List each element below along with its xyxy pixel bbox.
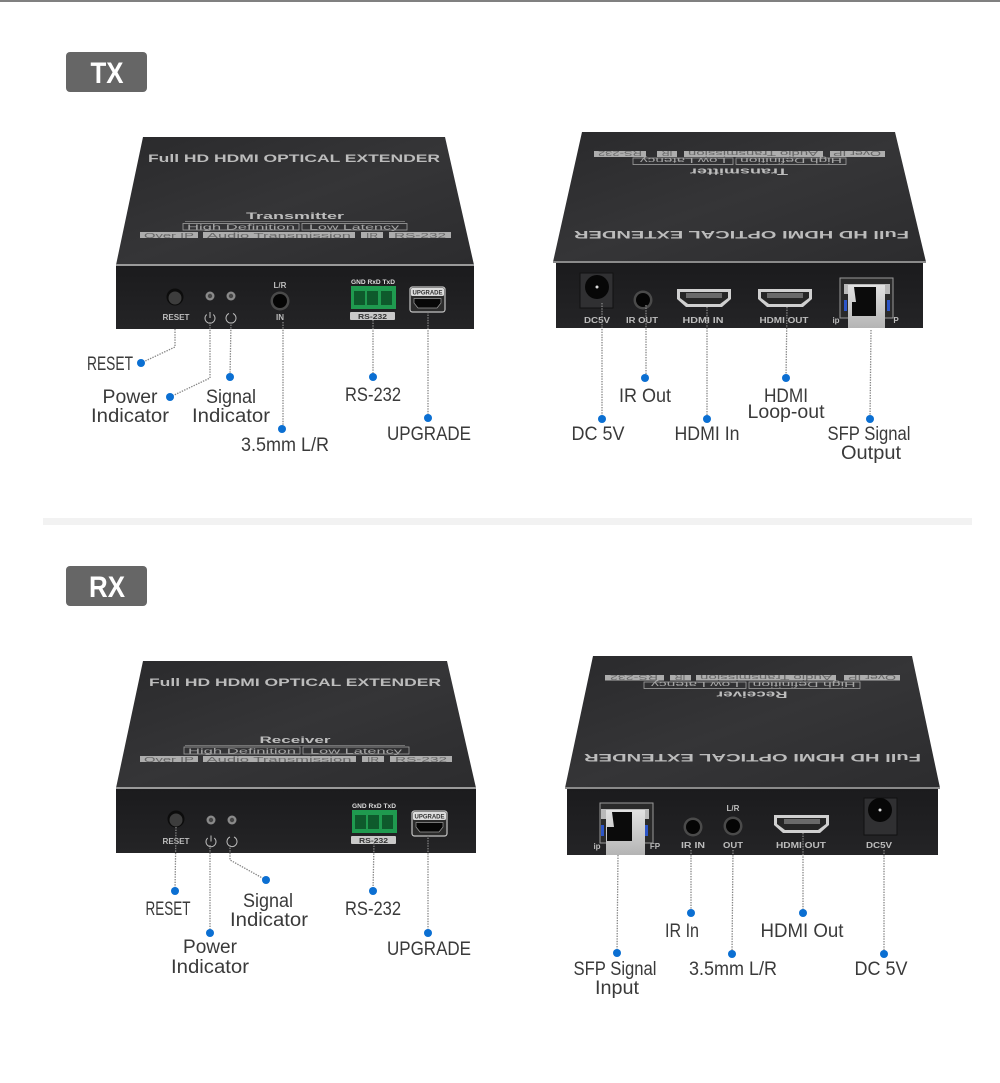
device: TX front housing: UPGRADE — [412, 290, 442, 296]
device: RX back housing: High Definition — [752, 680, 856, 687]
callout: RESET — [146, 827, 191, 920]
callout: 3.5mm L/R: 3.5mm L/R — [241, 435, 329, 456]
callout: SFP Signal Output — [828, 330, 910, 464]
callout: Signal Indicator — [230, 845, 309, 931]
device: RX front housing: GND RxD TxD — [352, 803, 396, 810]
callout: Power Indicator: Indicator — [171, 957, 250, 978]
device: RX back housing: Receiver — [716, 688, 788, 700]
device: RX back housing: Audio Transmission — [700, 673, 832, 680]
device: TX front housing: GND RxD TxD — [351, 279, 395, 286]
device: RX front housing: Over IP — [144, 757, 195, 764]
device: TX back housing: ip — [832, 316, 840, 325]
device: TX front housing: IR — [366, 233, 378, 240]
badge: TX — [66, 52, 147, 92]
callout: 3.5mm L/R — [689, 850, 777, 980]
callout: SFP Signal Output: SFP Signal — [828, 424, 910, 445]
device: RX front housing: Audio Transmission — [206, 757, 352, 764]
panel: TX back device — [553, 132, 926, 464]
badge: RX — [66, 566, 147, 606]
callout: HDMI In — [674, 307, 740, 445]
device: TX back housing: IR — [662, 149, 672, 156]
callout: Signal Indicator: Indicator — [192, 406, 271, 427]
callout: DC 5V — [572, 303, 625, 445]
device: TX back housing: P — [893, 316, 899, 325]
callout: SFP Signal Input — [574, 855, 656, 999]
callout: RESET — [87, 329, 175, 375]
device: RX back housing: IR — [674, 673, 686, 680]
device: TX front housing: RS-232 — [358, 312, 387, 321]
device: RX front housing: UPGRADE — [414, 814, 444, 820]
panel: RX back device — [565, 656, 940, 999]
device: RX back housing: ip — [593, 842, 601, 851]
device: RX back housing: DC5V — [866, 841, 893, 850]
callout: SFP Signal Input: SFP Signal — [574, 959, 656, 980]
callout: DC 5V — [854, 850, 908, 980]
callout: IR Out — [619, 305, 672, 407]
callout: SFP Signal Output: Output — [841, 443, 902, 464]
device: TX back housing: Over IP — [832, 149, 881, 156]
device: RX front housing: Low Latency — [310, 748, 403, 756]
callout: UPGRADE — [387, 312, 471, 445]
callout: Power Indicator — [171, 845, 250, 978]
device: TX front housing — [116, 137, 474, 329]
device: TX back housing: IR OUT — [626, 316, 658, 325]
device: TX front housing: Full HD HDMI OPTICAL EXTENDER — [148, 153, 440, 165]
device: RX front housing: Receiver — [260, 735, 331, 746]
device: RX back housing: RS-232 — [610, 673, 658, 680]
device: RX front housing: RS-232 — [395, 757, 447, 764]
device: RX back housing: Full HD HDMI OPTICAL EXTENDER — [584, 751, 921, 763]
device: TX front housing: Over IP — [144, 233, 195, 240]
device: TX front housing: RS-232 — [394, 233, 446, 240]
callout: IR In — [665, 850, 699, 942]
device: RX back housing: Over IP — [847, 673, 896, 680]
callout: Power Indicator: Power — [102, 387, 158, 408]
device: TX back housing: HDMI IN — [682, 316, 724, 325]
callout: RS-232: RS-232 — [345, 385, 401, 406]
device: RX front housing — [116, 661, 476, 853]
device: RX back housing: FP — [650, 842, 661, 851]
callout: DC 5V: DC 5V — [854, 959, 908, 980]
device: RX front housing: RS-232 — [359, 836, 388, 845]
callout: RESET: RESET — [146, 899, 191, 920]
callout: RS-232 — [345, 320, 401, 406]
callout: HDMI Loop-out — [748, 307, 825, 423]
callout: UPGRADE: UPGRADE — [387, 939, 471, 960]
device: RX back housing: HDMI OUT — [776, 841, 826, 850]
device: RX front housing: IR — [367, 757, 379, 764]
callout: Power Indicator: Indicator — [91, 406, 170, 427]
device: TX back housing: Audio Transmission — [688, 149, 818, 156]
callout: RESET: RESET — [87, 354, 133, 375]
callout: RS-232: RS-232 — [345, 899, 401, 920]
panel: TX front device — [87, 137, 474, 456]
callout: UPGRADE: UPGRADE — [387, 424, 471, 445]
device: TX front housing: L/R — [274, 281, 287, 290]
callout: DC 5V: DC 5V — [572, 424, 625, 445]
device: TX front housing: Transmitter — [246, 211, 345, 222]
device: TX front housing: Audio Transmission — [207, 233, 351, 240]
callout: UPGRADE — [387, 835, 471, 960]
callout: 3.5mm L/R — [241, 322, 329, 456]
callout: IR In: IR In — [665, 921, 699, 942]
device: TX back housing: HDMI OUT — [760, 316, 809, 325]
callout: SFP Signal Input: Input — [595, 978, 640, 999]
callout: IR Out: IR Out — [619, 386, 672, 407]
badge: RX: RX — [89, 571, 125, 604]
device: TX back housing: Low Latency — [639, 156, 726, 163]
device: TX front housing: Low Latency — [309, 224, 400, 232]
device: TX back housing: Transmitter — [689, 166, 788, 176]
callout: Power Indicator — [91, 322, 210, 427]
callout: 3.5mm L/R: 3.5mm L/R — [689, 959, 777, 980]
device: RX back housing — [565, 656, 940, 855]
device: TX front housing: High Definition — [187, 224, 295, 232]
callout: Signal Indicator: Signal — [243, 891, 293, 912]
device: TX back housing — [553, 132, 926, 328]
device: RX front housing: Full HD HDMI OPTICAL EXTENDER — [149, 677, 441, 689]
device: TX front housing: IN — [276, 313, 284, 322]
device: TX back housing: DC5V — [584, 316, 611, 325]
callout: HDMI In: HDMI In — [674, 424, 740, 445]
callout: RS-232 — [345, 843, 401, 920]
device: RX front housing: RESET — [162, 837, 190, 846]
device: TX front housing: RESET — [162, 313, 190, 322]
device: RX back housing: Low Latency — [650, 680, 739, 687]
callout: HDMI Out: HDMI Out — [760, 921, 844, 942]
device: RX back housing: L/R — [727, 804, 740, 813]
callout: HDMI Loop-out: Loop-out — [748, 402, 825, 423]
callout: Signal Indicator — [192, 322, 271, 427]
badge: TX: TX — [90, 57, 124, 90]
callout: HDMI Loop-out: HDMI — [764, 386, 808, 407]
callout: Signal Indicator: Signal — [206, 387, 256, 408]
device: RX front housing: High Definition — [188, 748, 296, 756]
device: TX back housing: High Definition — [740, 156, 842, 163]
device: RX back housing: OUT — [723, 841, 743, 850]
device: TX back housing: RS-232 — [598, 149, 642, 156]
panel: RX front device — [116, 661, 476, 978]
callout: Power Indicator: Power — [183, 937, 238, 958]
callout: HDMI Out — [760, 833, 844, 942]
device: RX back housing: IR IN — [681, 841, 705, 850]
callout: Signal Indicator: Indicator — [230, 910, 309, 931]
device: TX back housing: Full HD HDMI OPTICAL EXTENDER — [574, 228, 909, 240]
